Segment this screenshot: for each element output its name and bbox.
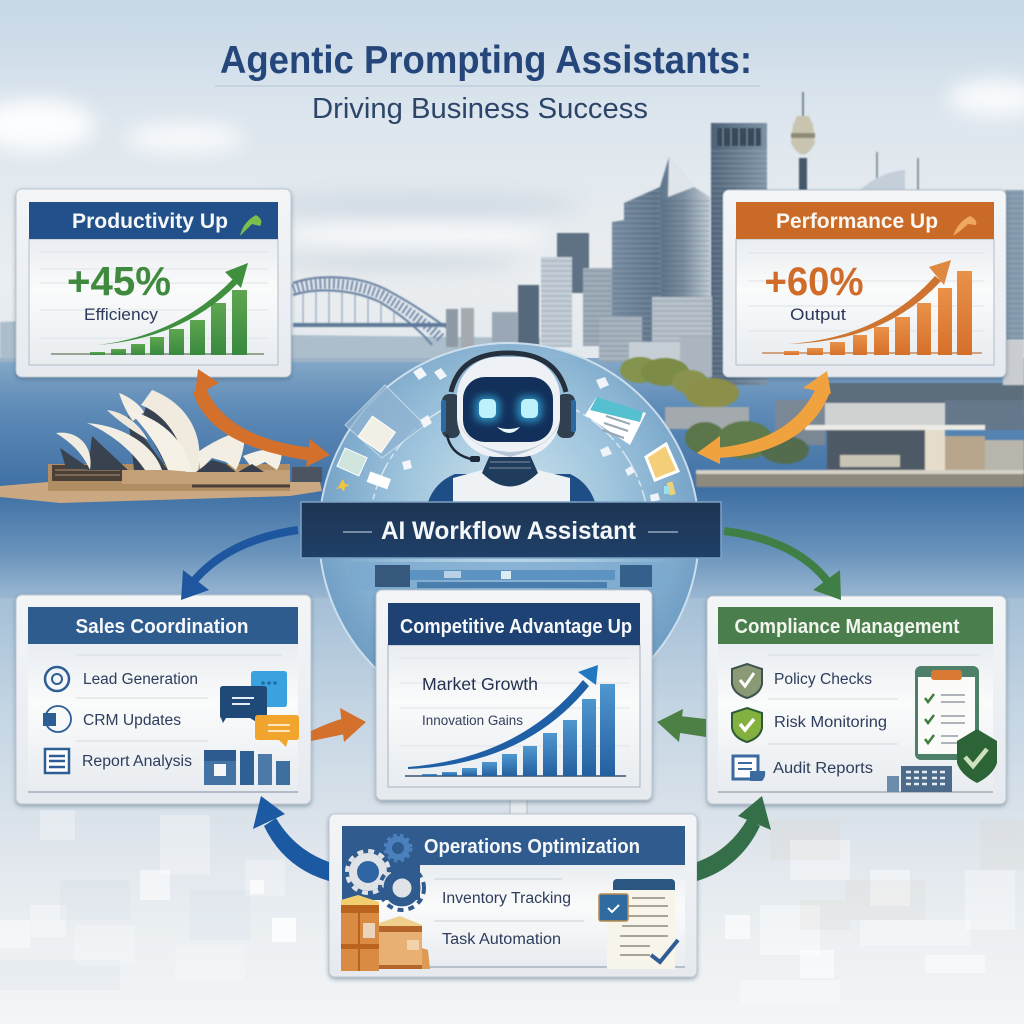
harbour bridge xyxy=(293,284,441,338)
arrow: compliance to competitive advantage, green xyxy=(657,709,706,742)
list: Policy Checks: Policy Checks xyxy=(774,671,872,688)
heading xyxy=(388,603,640,645)
list: Report Analysis xyxy=(45,749,192,773)
icon: building xyxy=(887,766,952,792)
background: pale mosaic fade xyxy=(0,810,1015,1004)
subtitle: Driving Business Success xyxy=(312,93,648,125)
icon: mini bar chart xyxy=(204,750,290,785)
central AI assistant orb xyxy=(319,343,699,723)
label: Task Automation: Task Automation xyxy=(442,931,561,948)
list: Policy Checks xyxy=(732,664,872,698)
arrow: performance to assistant, amber double xyxy=(697,371,831,464)
heading: Compliance Management xyxy=(734,616,960,638)
panel: Productivity Up xyxy=(16,189,291,377)
icon: warehouse boxes xyxy=(341,895,430,971)
heading: Productivity Up xyxy=(72,210,228,233)
floating documents xyxy=(336,367,678,502)
list: Report Analysis: Report Analysis xyxy=(82,753,192,770)
heading: Competitive Advantage Up xyxy=(400,615,632,638)
heading xyxy=(29,202,278,239)
robot xyxy=(428,353,595,502)
icon: green shield xyxy=(957,729,997,783)
icon: chat bubbles xyxy=(220,671,299,747)
bar chart: blue growth xyxy=(405,665,626,776)
metric: +60%: +60% xyxy=(764,260,864,304)
list: CRM Updates: CRM Updates xyxy=(83,712,181,729)
panel: Compliance Management xyxy=(707,596,1006,804)
far shore xyxy=(0,321,540,362)
trees and waterfront xyxy=(620,357,660,383)
server bar below banner xyxy=(350,562,670,590)
skyline xyxy=(518,285,539,345)
panel: Performance Up xyxy=(723,190,1006,377)
heading xyxy=(736,202,994,239)
bar chart: green growth xyxy=(51,263,264,355)
title: Agentic Prompting Assistants: xyxy=(220,39,752,82)
arrow: banner to sales, blue xyxy=(181,530,298,600)
heading: Sales Coordination xyxy=(76,616,248,638)
panel: Sales Coordination xyxy=(16,595,311,804)
label: Efficiency: Efficiency xyxy=(84,305,158,324)
banner: AI Workflow Assistant xyxy=(301,502,721,558)
label: Output: Output xyxy=(790,305,846,324)
panel: Operations Optimization xyxy=(329,814,697,977)
list: Lead Generation xyxy=(45,667,198,691)
list: Audit Reports xyxy=(733,756,873,781)
list: Lead Generation: Lead Generation xyxy=(83,671,198,688)
metric: +45%: +45% xyxy=(67,258,171,304)
landmark: Sydney Opera House xyxy=(0,390,322,503)
arrow: productivity to assistant, orange double xyxy=(193,369,330,467)
icon: gears xyxy=(347,835,424,910)
arrow: banner to compliance, green xyxy=(724,531,841,600)
arrow: operations to sales, blue xyxy=(253,796,329,881)
label: Innovation Gains: Innovation Gains xyxy=(422,713,523,728)
heading: Operations Optimization xyxy=(424,836,640,858)
list: Risk Monitoring: Risk Monitoring xyxy=(774,714,887,731)
heading xyxy=(718,607,993,644)
panel: Competitive Advantage Up xyxy=(376,590,652,800)
banner: AI Workflow Assistant: AI Workflow Assistant xyxy=(381,517,637,545)
icon: clipboard checklist xyxy=(915,666,979,760)
heading xyxy=(342,826,685,865)
label: Inventory Tracking: Inventory Tracking xyxy=(442,890,571,907)
heading: Performance Up xyxy=(776,210,938,233)
label: Market Growth: Market Growth xyxy=(422,674,538,694)
connector tab: competitive to operations xyxy=(510,798,527,824)
bar chart: orange growth xyxy=(762,260,982,355)
arrow: operations to compliance, green xyxy=(697,796,771,881)
list: Risk Monitoring xyxy=(732,708,887,742)
list: Audit Reports: Audit Reports xyxy=(773,760,873,777)
arrow: sales to competitive advantage, orange xyxy=(311,708,366,742)
heading xyxy=(28,607,298,644)
icon: checklist document xyxy=(599,879,678,969)
list: CRM Updates xyxy=(43,706,181,732)
